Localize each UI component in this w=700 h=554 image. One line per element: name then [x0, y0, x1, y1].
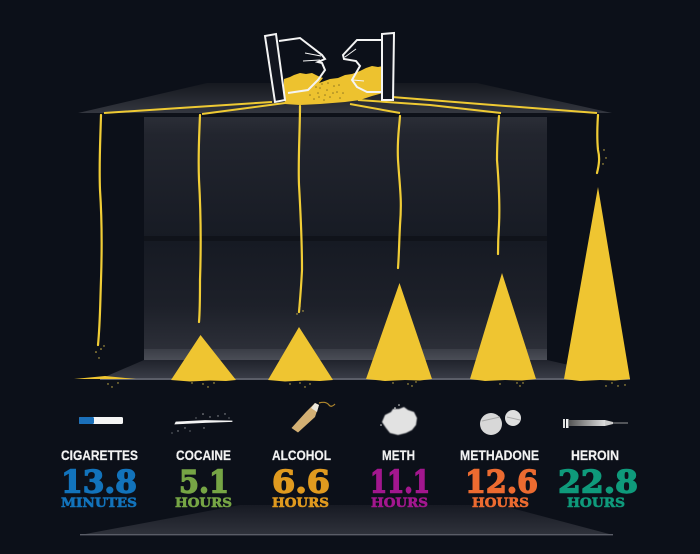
text block: alcohol: 6.6 [272, 464, 330, 500]
powder speckles [309, 82, 344, 101]
bottom band [80, 505, 613, 535]
floor [100, 360, 630, 379]
text block: methadone [460, 448, 539, 511]
ceiling [78, 83, 612, 113]
text block: meth [370, 448, 430, 511]
icon: heroin syringe [563, 419, 628, 428]
stream: alcohol [299, 106, 302, 312]
floor edge [100, 378, 630, 380]
stream: heroin [597, 115, 599, 173]
text block: cigarettes: 13.8 [61, 464, 137, 500]
pyramid: heroin [564, 187, 630, 381]
stream: methadone [497, 116, 499, 254]
pyramid: cigarettes [74, 376, 136, 379]
text block: cigarettes [61, 448, 138, 511]
stream: cocaine [199, 115, 201, 322]
text block: heroin: 22.8 [558, 464, 638, 500]
icon: methadone pills [480, 410, 521, 435]
powder pile [284, 66, 383, 105]
ceiling powder trails [104, 97, 597, 114]
text block: cigarettes: CIGARETTES [61, 448, 138, 463]
pyramid: methadone [470, 273, 536, 381]
icon: alcohol bottle [292, 402, 335, 432]
icon: cigarette [79, 417, 123, 424]
pyramid: cocaine [171, 335, 236, 382]
text block: meth: 11.1 [370, 464, 430, 500]
text block: cocaine: HOURS [175, 496, 232, 511]
pyramid: meth [366, 283, 432, 381]
text block: alcohol [272, 448, 331, 511]
icon: meth powder [380, 404, 417, 435]
text block: meth: METH [382, 448, 415, 463]
icon: fists crushing powder [265, 33, 394, 105]
stream: cigarettes [98, 115, 102, 345]
text block: methadone: 12.6 [465, 464, 538, 500]
right fist [343, 33, 394, 100]
text block: cocaine [175, 448, 232, 511]
left fist [265, 34, 325, 102]
back wall [144, 117, 547, 360]
ceiling edge [104, 113, 600, 116]
text block: meth: HOURS [371, 496, 428, 511]
text block: heroin [558, 448, 638, 511]
text block: alcohol: ALCOHOL [272, 448, 331, 463]
text block: methadone: METHADONE [460, 448, 539, 463]
powder streams [98, 106, 599, 345]
text block: cocaine: COCAINE [176, 448, 231, 463]
stream: meth [398, 116, 401, 268]
text block: heroin: HEROIN [571, 448, 619, 463]
text block: heroin: HOURS [567, 496, 625, 511]
panel: room [78, 83, 630, 380]
text block: alcohol: HOURS [272, 496, 329, 511]
powder pile speckles [95, 149, 626, 388]
text block: cigarettes: MINUTES [61, 496, 137, 511]
text block: cocaine: 5.1 [179, 464, 229, 500]
pyramid: alcohol [268, 327, 333, 382]
icon: line of cocaine [171, 413, 232, 434]
text block: methadone: HOURS [472, 496, 529, 511]
bar chart: powder pyramids [74, 187, 630, 382]
